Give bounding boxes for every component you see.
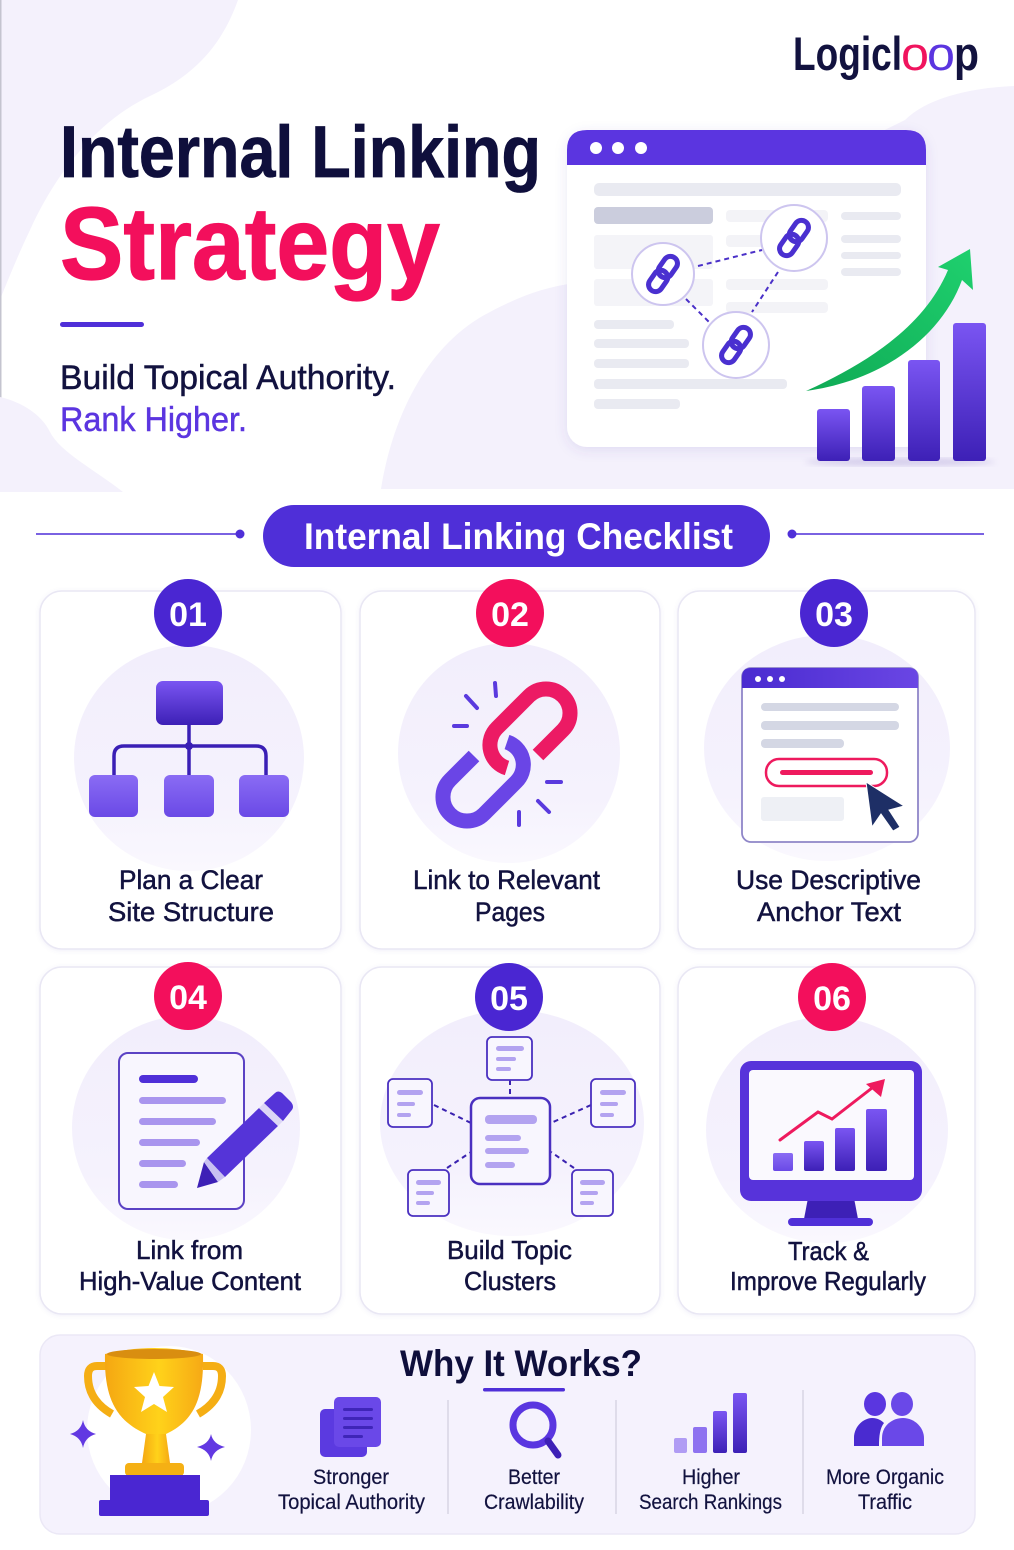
logo: Logicl: [793, 27, 902, 80]
link node 2: [761, 205, 827, 271]
icon: site hierarchy: [89, 681, 289, 817]
benefit: stronger topical authority: Stronger: [313, 1466, 389, 1489]
card 03 label: Anchor Text: [757, 897, 901, 927]
card 02 label: Link to Relevant: [413, 865, 600, 895]
number badge 03: 03: [815, 596, 853, 634]
title: Strategy: [60, 186, 440, 301]
subtitle: Rank Higher.: [60, 401, 247, 439]
panel: why it works: [40, 1335, 975, 1534]
benefit: stronger topical authority: Topical Authority: [278, 1491, 425, 1514]
green growth arrow: [806, 249, 973, 391]
window dots: [590, 142, 647, 154]
card 02: link to relevant pages: [360, 579, 660, 949]
heading rule left: [36, 530, 244, 538]
card 02 label: [413, 865, 600, 927]
icon: chain link: [443, 683, 570, 825]
benefit: stronger topical authority: [278, 1397, 425, 1514]
benefit: higher search rankings: Higher: [682, 1466, 740, 1489]
card 06 label: [730, 1236, 926, 1296]
number badge 01: 01: [169, 596, 207, 634]
number badge 04: [154, 962, 222, 1030]
card 06 label: Track &: [788, 1236, 869, 1266]
number badge 02: 02: [491, 596, 529, 634]
title: [60, 112, 541, 301]
benefit: better crawlability: Crawlability: [484, 1491, 584, 1514]
benefit: higher search rankings: [639, 1393, 782, 1514]
card 03 label: [736, 865, 921, 927]
benefit: higher search rankings: Search Rankings: [639, 1491, 782, 1514]
card 01 label: Site Structure: [108, 897, 274, 927]
card 04 label: High-Value Content: [79, 1266, 302, 1296]
sparkle right: [197, 1434, 225, 1461]
card 05 label: Build Topic: [447, 1235, 572, 1265]
link node 1: [632, 243, 694, 305]
benefit: better crawlability: Better: [508, 1466, 560, 1489]
number badge 05: [475, 963, 543, 1031]
number badge 06: 06: [813, 980, 851, 1018]
subtitle: [60, 359, 396, 439]
card 06 label: Improve Regularly: [730, 1266, 926, 1296]
number badge 06: [798, 963, 866, 1031]
divider: [802, 1390, 804, 1514]
icon: trophy: [87, 1346, 251, 1516]
hero section: [0, 0, 1014, 492]
number badge 05: 05: [490, 980, 528, 1018]
hero background blobs: [0, 0, 1014, 492]
window header: [567, 130, 926, 165]
logo: o: [927, 27, 955, 80]
page placeholder lines: [594, 183, 901, 409]
heading pill: Internal Linking Checklist: [304, 516, 733, 557]
benefit: better crawlability: [484, 1405, 584, 1514]
logo: o: [901, 27, 929, 80]
panel heading: Why It Works?: [400, 1343, 642, 1384]
dashed link connectors: [686, 250, 778, 323]
benefit: more organic traffic: Traffic: [858, 1491, 912, 1514]
title: Internal Linking: [60, 112, 541, 193]
icon: topic cluster diagram: [388, 1037, 635, 1216]
card 01 label: Plan a Clear: [119, 865, 263, 895]
card 03: use descriptive anchor text: [678, 579, 975, 949]
growth bar chart: [805, 323, 995, 466]
number badge 04: 04: [169, 979, 207, 1017]
logo: p: [954, 27, 979, 80]
card 04: link from high-value content: [40, 962, 341, 1314]
number badge 02: [476, 579, 544, 647]
benefit: more organic traffic: [826, 1392, 944, 1514]
card 05: build topic clusters: [360, 963, 660, 1314]
card 05 label: Clusters: [464, 1266, 556, 1296]
divider: [615, 1400, 617, 1514]
card 03 label: Use Descriptive: [736, 865, 921, 895]
browser window illustration: [567, 130, 926, 447]
benefit: more organic traffic: More Organic: [826, 1466, 944, 1489]
subtitle: Build Topical Authority.: [60, 359, 396, 397]
title accent bar: [60, 322, 144, 327]
card 04 label: [79, 1235, 302, 1296]
heading rule right: [788, 530, 984, 538]
icon: document with pencil: [119, 1053, 293, 1209]
card 01 label: [108, 865, 274, 927]
icon: browser with anchor text and cursor: [742, 668, 918, 842]
card 01: plan a clear site structure: [40, 579, 341, 949]
link node 3: [703, 312, 769, 378]
icon: analytics monitor: [740, 1061, 922, 1226]
divider: [447, 1400, 449, 1514]
window frame: [567, 130, 926, 447]
card 02 label: Pages: [475, 897, 545, 927]
heading pill: [263, 505, 770, 567]
number badge 01: [154, 579, 222, 647]
sparkle left: [70, 1420, 96, 1448]
card 05 label: [447, 1235, 572, 1296]
number badge 03: [800, 579, 868, 647]
checklist heading: [36, 505, 984, 567]
card 04 label: Link from: [136, 1235, 243, 1265]
card 06: track and improve regularly: [678, 963, 975, 1314]
